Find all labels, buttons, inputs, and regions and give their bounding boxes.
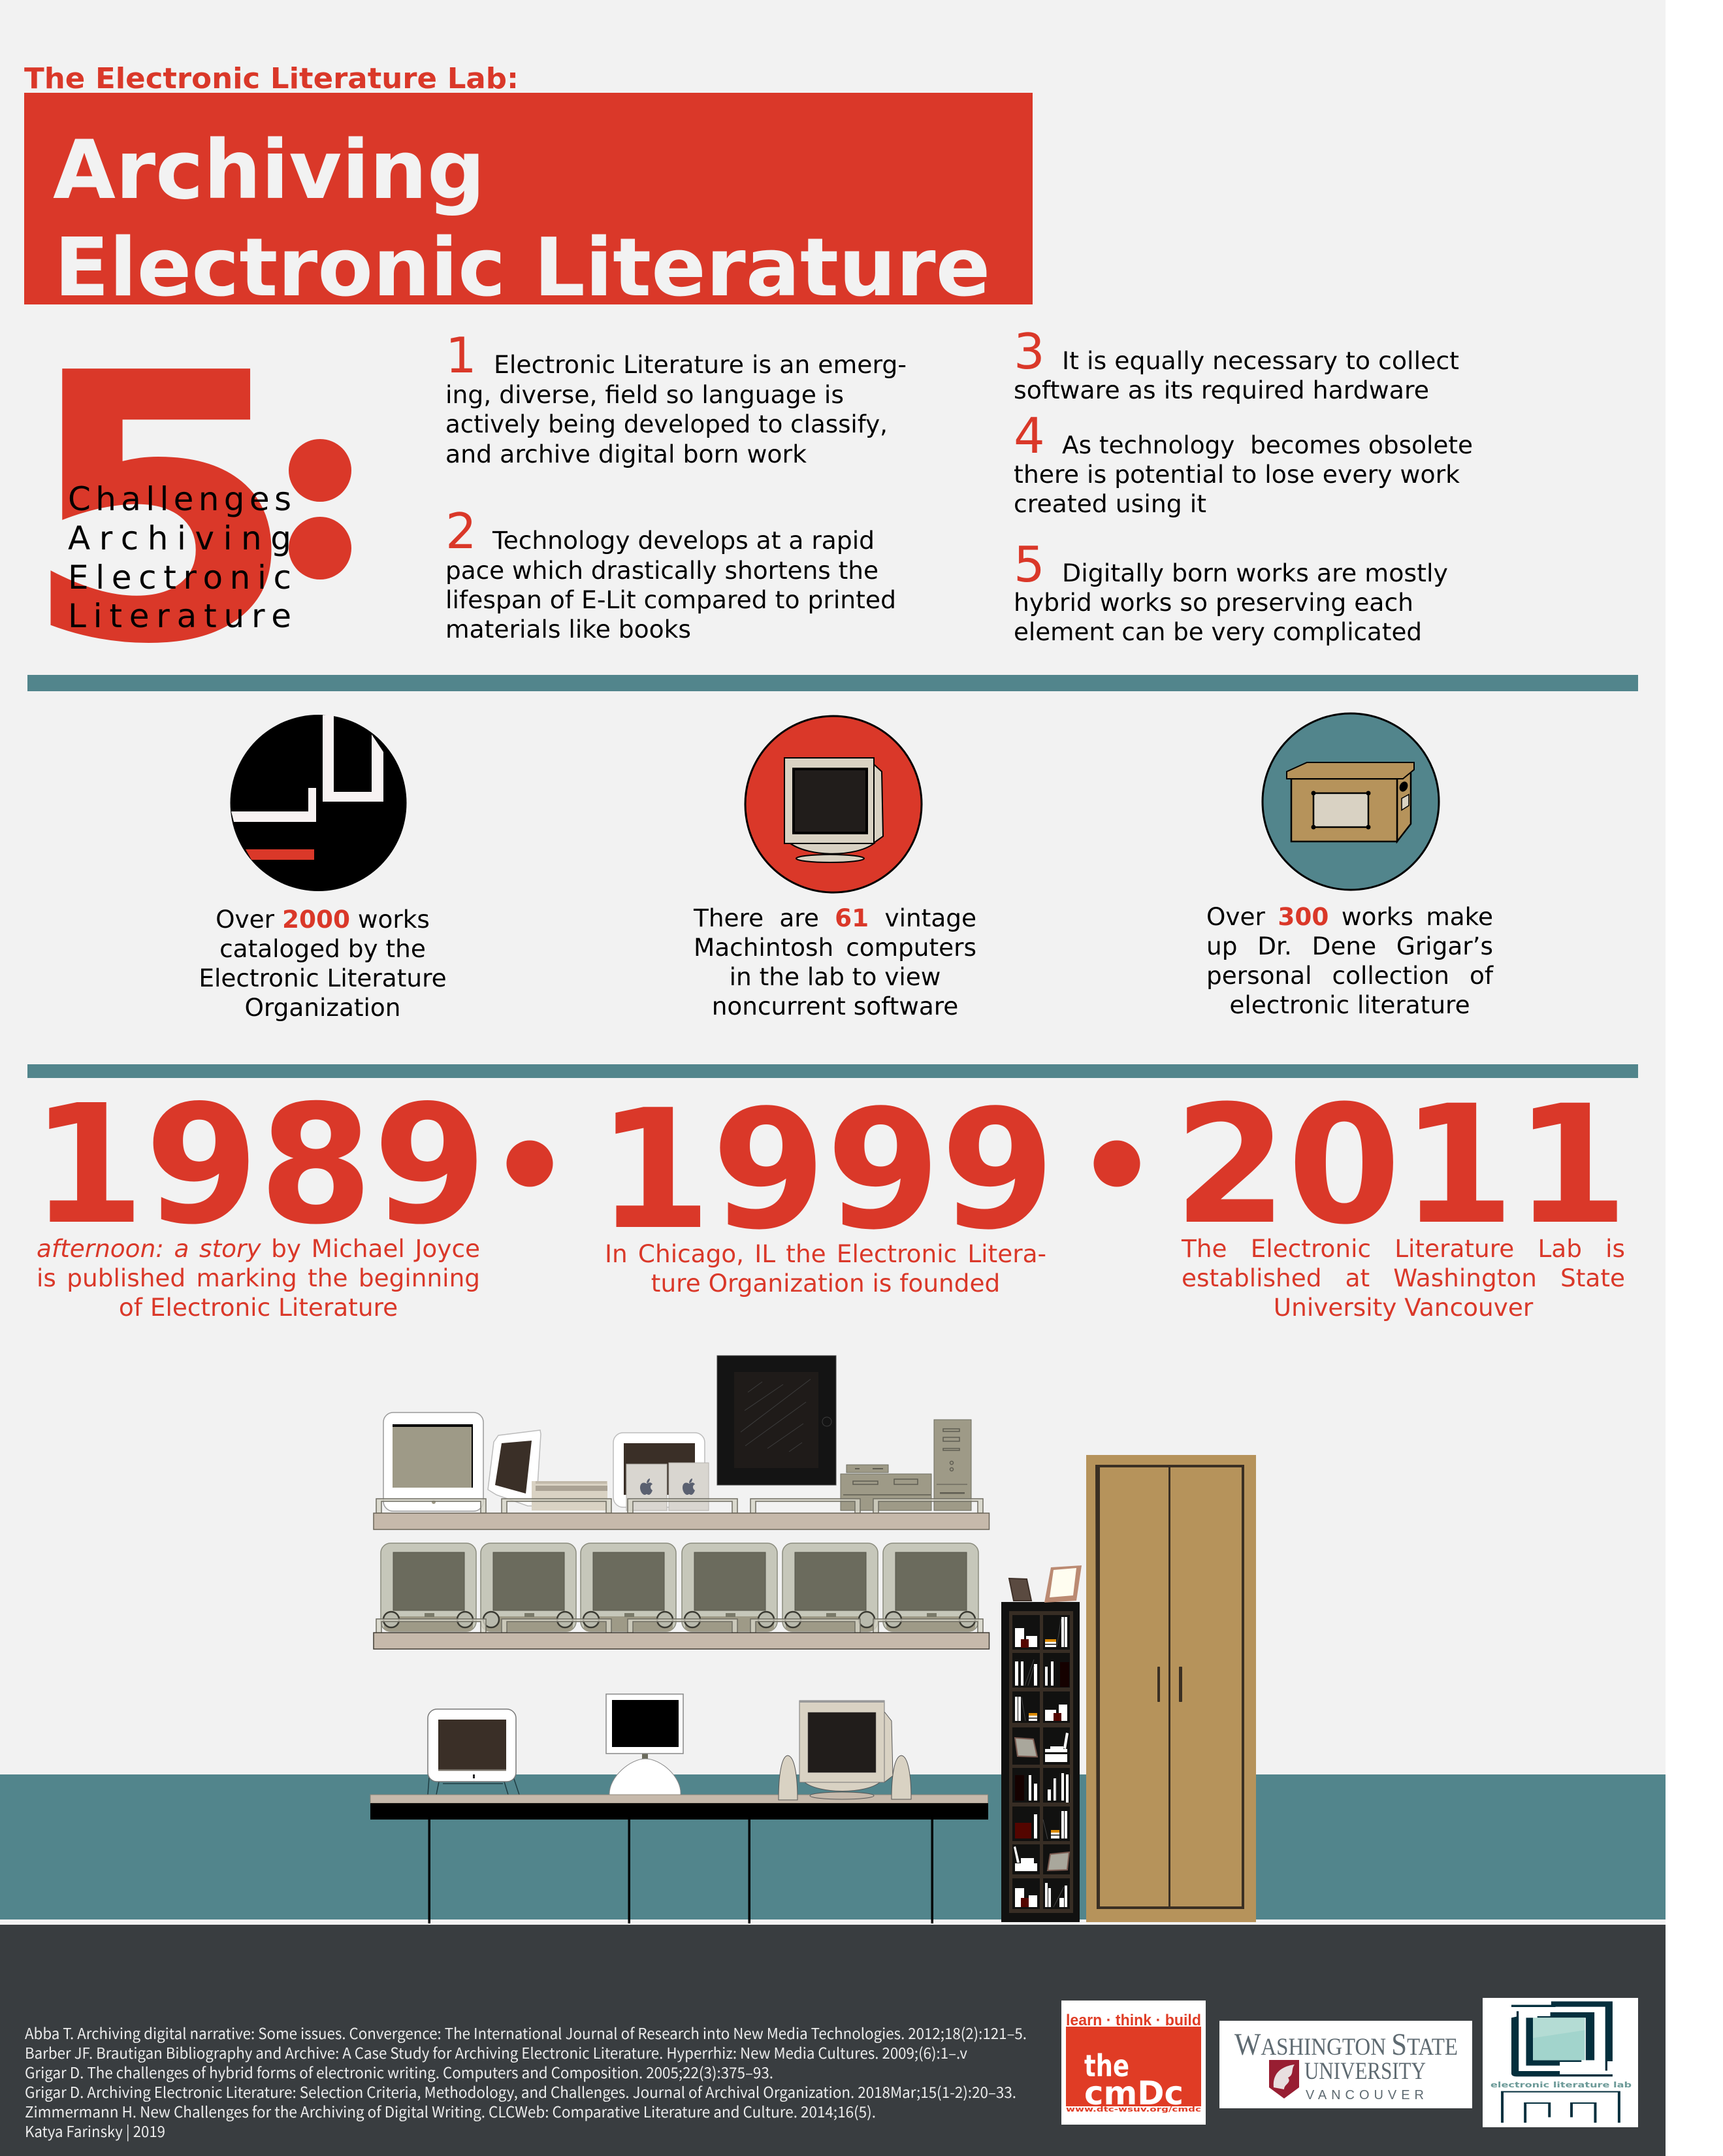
stat: 2000 works: Over 2000 works [216, 905, 430, 934]
icon: electronic literature organization logo [230, 715, 406, 891]
wardrobe [1086, 1455, 1256, 1922]
imac behind boxes [613, 1433, 705, 1507]
big 5 challenges heading: Electronic [68, 559, 291, 596]
caption 1999: ture Organization is founded [651, 1269, 1000, 1298]
desk legs [428, 1820, 933, 1923]
logo: Washington State University Vancouver [1219, 2021, 1472, 2108]
title banner: Archiving [53, 123, 485, 218]
bookcase [1001, 1602, 1080, 1922]
references: Grigar D. Archiving Electronic Literature: Selection Criteria, Methodology, and Challenges. Journal of Archival Organization. 2018Mar;15(1-2):20–33. [25, 2080, 1016, 2102]
references: Katya Farinsky | 2019 [25, 2119, 165, 2142]
challenge 1: and archive digital born work [445, 440, 807, 468]
challenge 4 [1014, 407, 1473, 518]
challenge 1: 1 [445, 327, 477, 384]
challenge 3: software as its required hardware [1014, 376, 1429, 404]
challenge 1: ing, diverse, field so language is [445, 380, 844, 409]
desk with computers [370, 1694, 988, 1923]
challenge 3: 3 [1014, 323, 1045, 380]
tilted imac [488, 1430, 541, 1506]
upper shelf with computers [374, 1356, 989, 1529]
black cabinet [717, 1356, 836, 1485]
logo: Washington State University Vancouver: UNIVERSITY [1304, 2058, 1426, 2085]
icon: vintage computer [745, 716, 922, 892]
challenge 2: Technology develops at a rapid [492, 526, 875, 555]
challenge 4: created using it [1014, 489, 1206, 518]
references: Zimmermann H. New Challenges for the Archiving of Digital Writing. CLCWeb: Comparative Literature and Culture. 2014;16(5). [25, 2100, 876, 2122]
logo: the CMDC: www.dtc-wsuv.org/cmdc [1066, 2105, 1201, 2114]
stat: 300 works: Over 300 works make [1206, 902, 1493, 931]
apple boxes [626, 1463, 709, 1511]
stack of books [532, 1481, 607, 1511]
title banner [24, 93, 1033, 315]
challenge 5: 5 [1014, 536, 1045, 593]
white imac [383, 1413, 483, 1511]
picture frames on bookcase [1009, 1565, 1082, 1603]
caption 1989: is published marking the beginning [37, 1264, 480, 1292]
challenge 5 [1014, 536, 1448, 646]
big 5 challenges heading: 5 [20, 295, 300, 725]
year 1999: 1999 [597, 1075, 1055, 1266]
caption 1989 [37, 1234, 480, 1322]
stat: 2000 works: Organization [244, 993, 401, 1022]
stat: 61 computers: Machintosh computers [694, 933, 976, 962]
year 2011: 2011 [1174, 1070, 1628, 1260]
big 5 challenges heading: Literature [68, 597, 291, 635]
caption 2011 [1181, 1234, 1625, 1322]
references: Abba T. Archiving digital narrative: Some issues. Convergence: The International Journal of Research into New Media Technologies. 2012;18(2):121–5. [25, 2021, 1027, 2044]
logo: the CMDC [1061, 2001, 1206, 2125]
stat: 300 works: electronic literature [1229, 990, 1470, 1019]
separator dot [507, 1141, 553, 1186]
challenge 3 [1014, 323, 1459, 404]
caption 1989: afternoon: a story by Michael Joyce [37, 1234, 480, 1263]
references [25, 2021, 1027, 2142]
challenge 2 [445, 502, 896, 644]
stat: 2000 works: Electronic Literature [199, 964, 447, 992]
wall band [0, 1774, 1666, 1919]
tower computer [934, 1420, 971, 1511]
logo: the CMDC: the [1084, 2048, 1129, 2083]
footer background [0, 1925, 1666, 2156]
stat: 300 works [1206, 902, 1494, 1019]
stat: 300 works: personal collection of [1206, 961, 1493, 990]
white imac on stand [428, 1709, 519, 1795]
crt monitor with speakers [779, 1701, 911, 1800]
references: Grigar D. The challenges of hybrid forms of electronic writing. Computers and Composition. 2005;22(3):375–93. [25, 2061, 773, 2083]
challenge 2: lifespan of E-Lit compared to printed [445, 585, 896, 614]
stat: 2000 works [199, 905, 447, 1022]
logo: Washington State University Vancouver: VANCOUVER [1306, 2088, 1424, 2102]
challenge 4: 4 [1014, 407, 1045, 465]
stat: 2000 works: cataloged by the [219, 934, 426, 963]
title banner: Electronic Literature [54, 221, 990, 315]
challenge 4: there is potential to lose every work [1014, 460, 1460, 489]
caption 1999 [605, 1239, 1046, 1298]
challenge 3: It is equally necessary to collect [1062, 346, 1459, 375]
challenge 2: materials like books [445, 615, 691, 644]
challenge 2: pace which drastically shortens the [445, 556, 878, 585]
desktop computer [841, 1465, 931, 1511]
lower shelf with six computers [374, 1543, 989, 1649]
logo: the CMDC: learn · think · build [1066, 2012, 1201, 2029]
stat: 61 computers: There are 61 vintage [694, 904, 976, 932]
big 5 challenges heading: Archiving [68, 519, 291, 557]
stat: 61 computers: in the lab to view [730, 962, 941, 991]
stat: 61 computers: noncurrent software [712, 992, 958, 1021]
stat: 61 computers [694, 904, 976, 1021]
challenge 1: Electronic Literature is an emerg- [494, 350, 907, 379]
logo: Washington State University Vancouver: WASHINGTON STATE [1234, 2027, 1458, 2062]
logo: electronic literature lab [1483, 1998, 1638, 2127]
caption 1999: In Chicago, IL the Electronic Litera- [605, 1239, 1046, 1268]
challenge 5: hybrid works so preserving each [1014, 588, 1413, 617]
caption 1989: of Electronic Literature [119, 1293, 398, 1322]
challenge 5: element can be very complicated [1014, 617, 1422, 646]
caption 2011: The Electronic Literature Lab is [1182, 1234, 1625, 1263]
lamp imac [606, 1694, 683, 1795]
icon: archival box [1263, 713, 1439, 890]
caption 2011: University Vancouver [1274, 1293, 1533, 1322]
year 1989: 1989 [31, 1070, 487, 1261]
stat: 300 works: up Dr. Dene Grigar’s [1206, 932, 1493, 960]
challenge 1: actively being developed to classify, [445, 410, 888, 438]
challenge 5: Digitally born works are mostly [1062, 559, 1448, 587]
references: Barber JF. Brautigan Bibliography and Archive: A Case Study for Archiving Electronic Literature. Hyperrhiz: New Media Cultures. 2009;(6):1–.v [25, 2041, 967, 2063]
big 5 challenges heading: Challenges [68, 480, 291, 518]
challenge 2: 2 [445, 502, 477, 560]
logo: the CMDC: cmDc [1084, 2074, 1184, 2112]
separator dot [1093, 1141, 1140, 1186]
caption 2011: established at Washington State [1182, 1264, 1625, 1292]
logo: electronic literature lab: electronic literature lab [1490, 2080, 1632, 2089]
challenge 4: As technology becomes obsolete [1062, 431, 1473, 459]
challenge 1 [445, 327, 907, 468]
subtitle: The Electronic Literature Lab: [24, 62, 519, 95]
